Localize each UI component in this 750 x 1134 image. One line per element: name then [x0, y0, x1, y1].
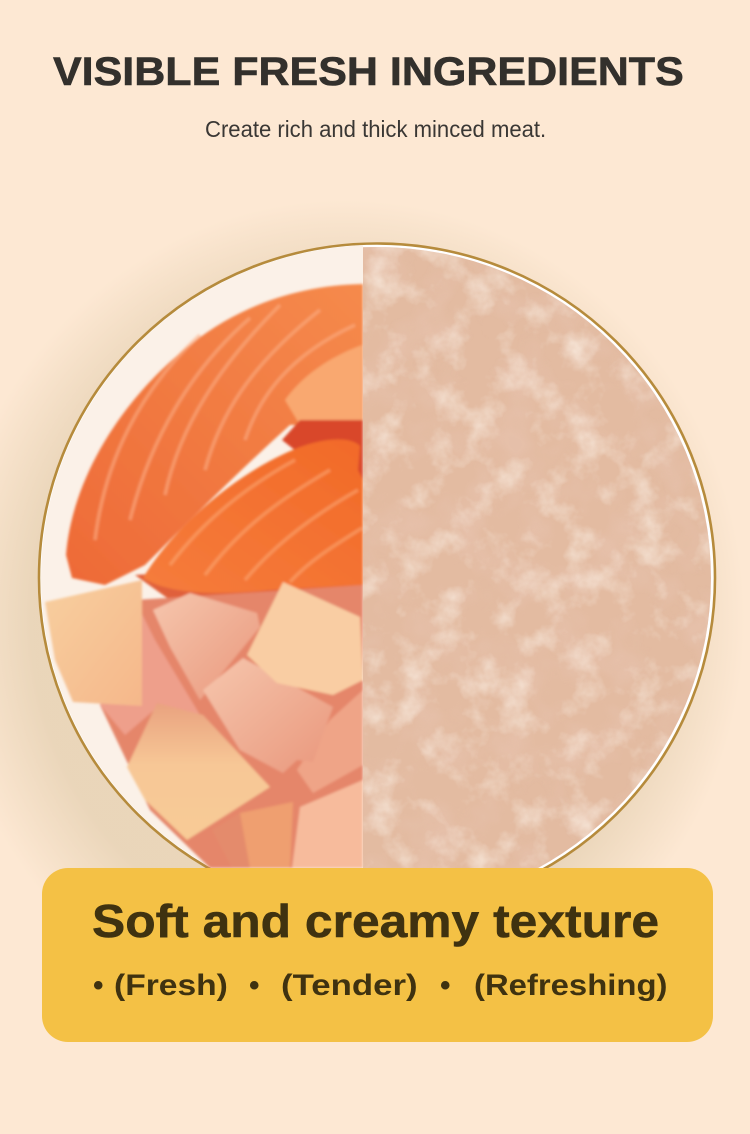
- left half: fresh ingredients: [41, 245, 363, 868]
- background shadow: [0, 150, 750, 1050]
- mince light texture: [363, 240, 723, 880]
- texture panel: [42, 868, 713, 1042]
- chicken piece 1: [45, 580, 142, 706]
- gold rim: [39, 244, 715, 912]
- right half: minced meat: [363, 247, 711, 868]
- panel keywords: •: [249, 969, 260, 1002]
- panel keywords: (Tender): [281, 969, 418, 1002]
- subtitle: Create rich and thick minced meat.: [205, 116, 546, 142]
- chicken piece 3: [247, 582, 363, 695]
- panel keywords: •: [440, 969, 451, 1002]
- chicken piece 5: [297, 690, 363, 793]
- panel keywords: •: [93, 969, 104, 1002]
- panel keywords: (Refreshing): [474, 969, 667, 1002]
- salmon upper fillet: [66, 284, 363, 585]
- chicken background: [100, 585, 363, 868]
- chicken piece 6: [127, 703, 270, 840]
- white plate: [41, 245, 363, 868]
- pink chicken slice: [100, 616, 199, 735]
- lower fillet stripes: [170, 460, 362, 582]
- mince dark texture: [388, 247, 708, 868]
- pink patch: [242, 831, 250, 868]
- panel heading: Soft and creamy texture: [92, 895, 659, 947]
- chicken piece 4: [203, 658, 333, 773]
- chicken piece 8: [292, 780, 363, 868]
- chicken piece 7: [240, 802, 293, 868]
- bowl illustration: [38, 242, 716, 868]
- salmon stripes: [95, 305, 355, 540]
- title: VISIBLE FRESH INGREDIENTS: [53, 50, 684, 94]
- salmon lower fillet: [143, 439, 363, 593]
- panel keywords: [93, 969, 667, 1002]
- lower salmon shadow: [134, 572, 354, 600]
- panel keywords: (Fresh): [114, 969, 228, 1002]
- salmon pale layer: [285, 345, 362, 425]
- salmon dark middle: [282, 420, 363, 480]
- chicken piece 2: [153, 593, 260, 700]
